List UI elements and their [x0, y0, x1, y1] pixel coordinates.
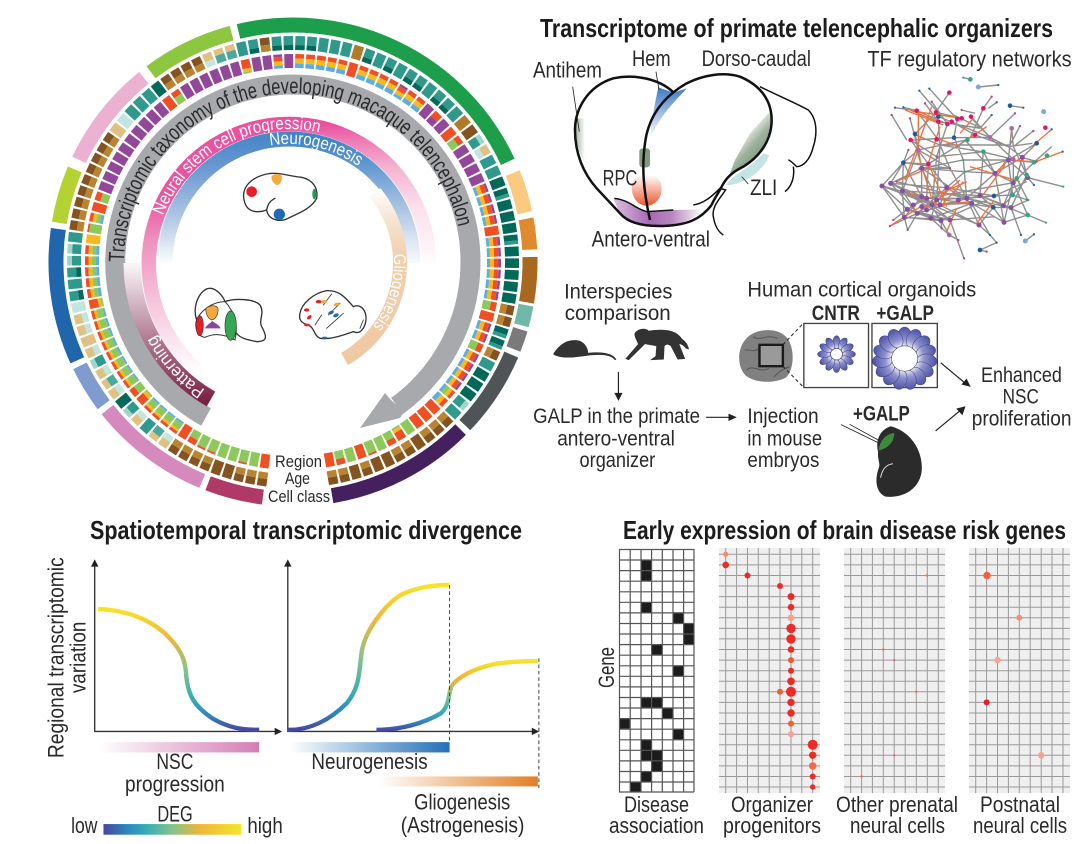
panel: TF regulatory networks	[867, 47, 1072, 258]
icon: brain, patterning stage	[195, 288, 265, 342]
arc: lime	[59, 169, 75, 223]
legend: DEG: DEG	[157, 802, 193, 826]
text: Enhanced NSC proliferation: Enhanced	[981, 362, 1062, 387]
label: Age: Age	[285, 469, 310, 488]
label: Postnatal neural cells: Postnatal	[980, 792, 1060, 817]
network edges: grey	[882, 78, 1063, 258]
arc: grey	[513, 329, 520, 349]
tile ring: region	[85, 54, 501, 469]
ring legend labels	[268, 452, 330, 506]
panel: embryonic brain organizers	[533, 46, 816, 252]
heading: Human cortical organoids: Human cortical organoids	[747, 277, 976, 302]
arrow: embryo to enhanced	[936, 406, 966, 431]
label: Organizer progenitors: Organizer	[731, 792, 813, 817]
label: Gliogenesis (Astrogenesis): Gliogenesis	[414, 790, 510, 815]
label: Organizer progenitors	[723, 792, 821, 838]
arc: patterning	[124, 263, 216, 406]
label: Hem: Hem	[632, 46, 671, 71]
heading: Interspecies comparison	[564, 279, 672, 325]
arrow head	[360, 393, 404, 428]
text: Injection in mouse embryos: Injection	[747, 403, 819, 428]
expression dots	[860, 574, 928, 778]
organizer: antihem shading	[575, 118, 585, 163]
arrow: down	[614, 372, 623, 401]
curve: gliogenesis	[376, 661, 538, 730]
label: Cell class: Cell class	[268, 487, 330, 506]
label: Neurogenesis: Neurogenesis	[311, 749, 428, 774]
label: Gliogenesis (Astrogenesis): (Astrogenesis)	[401, 812, 524, 837]
label: NSC progression: progression	[125, 772, 225, 796]
bar: neurogenesis	[289, 742, 450, 752]
arrow: to injection	[706, 414, 737, 421]
arc: periwinkle	[80, 366, 104, 405]
panel: organizer progenitors dot grid	[719, 548, 820, 793]
arc: dark green	[238, 25, 508, 162]
text: GALP in the primate antero-ventral organizer: GALP in the primate	[533, 403, 700, 428]
network nodes: small magenta	[890, 97, 1037, 258]
icon: brain, gliogenesis stage	[300, 291, 366, 339]
bar: NSC progression	[99, 742, 259, 752]
label: Disease association	[609, 792, 704, 838]
label: Antero-ventral: Antero-ventral	[592, 227, 710, 252]
text: GALP in the primate antero-ventral organizer: antero-ventral	[557, 426, 675, 450]
label: Organizer progenitors: progenitors	[723, 813, 821, 838]
legend: DEG	[71, 802, 283, 838]
label: Disease association: Disease	[624, 792, 689, 817]
label: Other prenatal neural cells	[836, 792, 958, 838]
arc: light orange	[513, 173, 525, 213]
network nodes: teal	[967, 79, 1047, 215]
label: Other prenatal neural cells: Other prenatal	[836, 792, 958, 817]
label: Region: Region	[275, 452, 322, 471]
legend: DEG: high	[247, 813, 283, 838]
panel: +GALP rosette	[872, 323, 938, 391]
panel: postnatal dot grid	[969, 548, 1070, 793]
bar: gliogenesis	[379, 776, 538, 786]
organizer: RPC red	[632, 175, 662, 206]
heading: Interspecies comparison: Interspecies	[564, 279, 672, 303]
panel: interspecies and organoid experiments	[533, 277, 1071, 497]
black association cells	[619, 560, 694, 792]
dashed guides	[450, 585, 539, 788]
label: CNTR: CNTR	[812, 300, 860, 325]
arc: gliogenesis: Gliogenesis	[374, 254, 406, 330]
label: ZLI: ZLI	[750, 175, 777, 200]
expression dots	[722, 552, 818, 790]
label: Postnatal neural cells	[973, 792, 1067, 838]
chart axes: right	[284, 559, 539, 735]
axis label	[44, 557, 91, 758]
label: Gliogenesis (Astrogenesis)	[401, 790, 524, 837]
network nodes: purple	[882, 157, 1028, 225]
heading: Interspecies comparison: comparison	[565, 300, 671, 325]
expression dots	[983, 572, 1044, 758]
outer cell-class arcs	[56, 25, 530, 497]
small brain illustrations	[195, 173, 366, 342]
arc: pale pink	[79, 78, 144, 160]
label: NSC progression: NSC	[156, 749, 193, 774]
label: +GALP organoid: +GALP	[876, 300, 934, 325]
organizer: midline green patch	[639, 148, 650, 167]
grey taxonomy arrow with title	[105, 74, 480, 428]
label: NSC progression	[125, 749, 225, 796]
left hemisphere outline	[575, 77, 712, 226]
network nodes: dark blue	[903, 106, 1037, 250]
axis label: Gene: Gene	[594, 647, 619, 688]
arc: mauve	[108, 410, 202, 481]
legend: DEG: low	[71, 813, 98, 838]
network nodes: light blue	[978, 87, 1044, 241]
arc: teal	[521, 305, 526, 325]
arrow: organoid to enhanced	[941, 363, 971, 387]
network edges: orange	[890, 107, 1063, 232]
arc: light green	[151, 33, 232, 72]
right hemisphere outline	[643, 74, 772, 220]
panel: spatiotemporal divergence charts	[44, 557, 539, 838]
arc: blue	[56, 229, 77, 360]
curve: NSC	[98, 609, 259, 730]
midbrain and stem outline	[614, 87, 816, 235]
axis label: variation	[65, 622, 91, 693]
panel: CNTR rosette	[804, 323, 869, 388]
organizer: dorso-caudal shading	[729, 112, 771, 176]
arc: orange	[526, 219, 530, 250]
chart axes: left	[91, 559, 282, 735]
text: Injection in mouse embryos: in mouse	[747, 426, 822, 450]
title: spatiotemporal transcriptomic divergence: Spatiotemporal transcriptomic divergence	[90, 515, 522, 545]
text: Injection in mouse embryos	[747, 403, 822, 472]
icon: monkey	[625, 329, 689, 360]
text: GALP in the primate antero-ventral organizer: organizer	[580, 447, 655, 472]
tile ring: age	[67, 36, 519, 486]
label: Other prenatal neural cells: neural cells	[850, 813, 945, 838]
text: GALP in the primate antero-ventral organizer	[533, 403, 700, 472]
label: +GALP embryo: +GALP	[853, 401, 910, 425]
arrow shaft	[115, 85, 470, 417]
icon: mouse	[553, 340, 616, 360]
icon: organoid sphere	[739, 323, 803, 387]
arc: brown	[526, 257, 530, 302]
panel: other prenatal dot grid	[844, 548, 945, 793]
curve: neurogenesis	[288, 585, 450, 730]
arc: gliogenesis	[341, 188, 408, 365]
icon: brain, early stage	[244, 173, 317, 220]
arc: dark purple	[332, 430, 461, 496]
panel: disease association grid	[619, 549, 694, 792]
label: Disease association: association	[609, 813, 704, 838]
text: Enhanced NSC proliferation	[972, 362, 1071, 430]
axis label: Regional transcriptomic	[44, 557, 69, 758]
leader lines	[573, 72, 748, 184]
organizer: ZLI aqua	[726, 153, 769, 185]
organizer: hem shading	[650, 87, 687, 138]
organizer: antero-ventral purple	[613, 199, 703, 225]
arc title: Transcriptomic taxonomy of the developing macaque telencephalon	[108, 78, 470, 262]
arc: dark grey	[465, 355, 511, 425]
network nodes: magenta	[911, 93, 1045, 164]
arc: neurogenesis	[158, 132, 420, 263]
network nodes: small teal	[963, 78, 1063, 223]
text: Enhanced NSC proliferation: NSC	[1003, 384, 1039, 409]
arc: neurogenesis: Neurogenesis	[270, 132, 362, 165]
label: Dorso-caudal: Dorso-caudal	[702, 46, 811, 71]
icon: mouse embryo	[841, 424, 922, 497]
arc: magenta	[208, 483, 263, 497]
arc: patterning: Patterning	[148, 335, 204, 399]
network nodes: small blue	[895, 85, 1063, 243]
label: Antihem: Antihem	[533, 58, 602, 83]
label: RPC: RPC	[603, 166, 637, 191]
arc: neural stem cell progression	[142, 116, 436, 362]
network nodes: violet	[918, 128, 1013, 235]
text: Injection in mouse embryos: embryos	[747, 447, 819, 472]
arc: neural stem cell progression: Neural stem cell progression	[152, 117, 320, 214]
